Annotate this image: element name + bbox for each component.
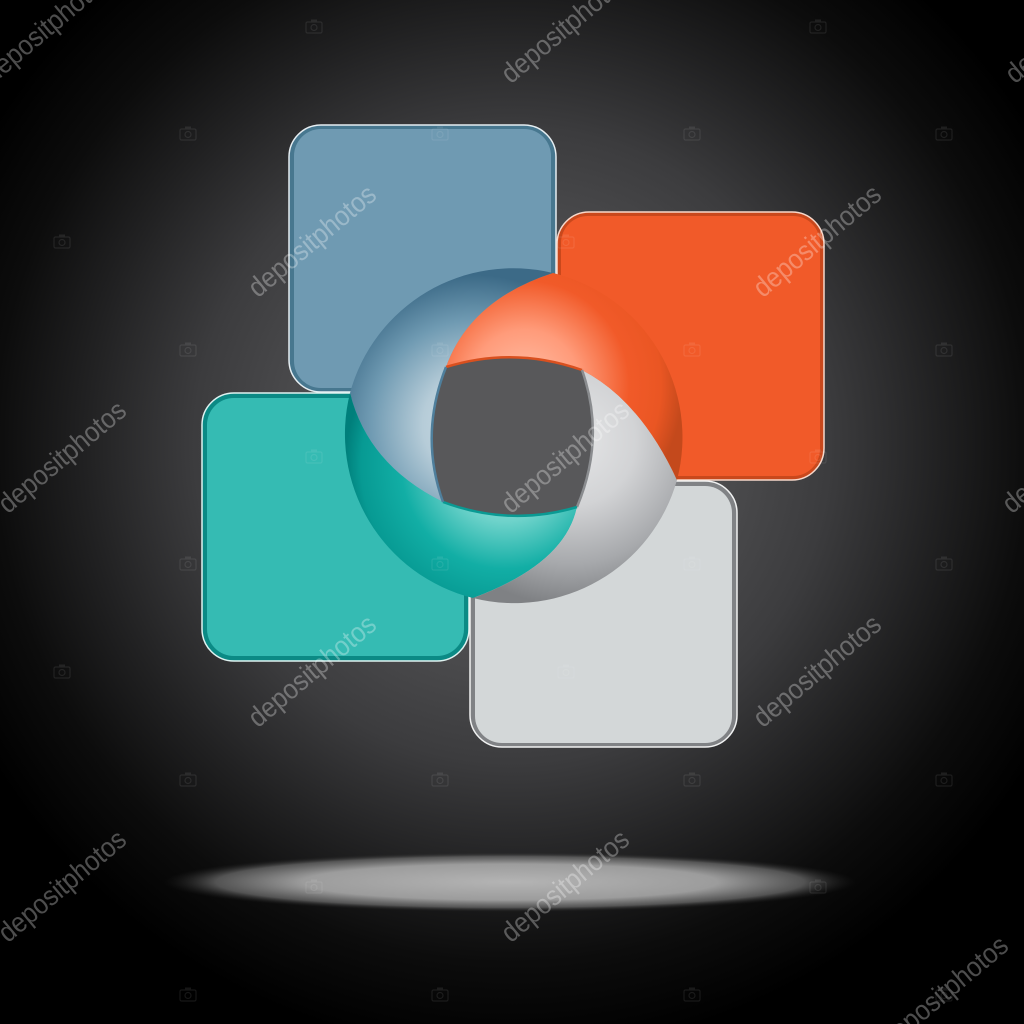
panel: teal square [202, 393, 469, 661]
ring segment: orange [446, 273, 682, 480]
hole lip: bottom [443, 502, 577, 516]
watermark texts: depositphotos [495, 823, 635, 948]
ring segment: teal [345, 393, 577, 598]
hole lip: right [577, 370, 593, 507]
watermark texts: depositphotos [747, 178, 887, 303]
watermark texts: depositphotos [242, 608, 382, 733]
watermark texts: depositphotos [242, 178, 382, 303]
ring segment: grey [473, 370, 677, 603]
floor light ellipse [164, 852, 856, 912]
watermark texts: depositphotos [747, 608, 887, 733]
central ring [345, 268, 682, 603]
watermark texts: depositphotos [495, 394, 635, 519]
hole lip: top [446, 357, 582, 370]
centre hole [432, 357, 593, 516]
ring segment: blue [350, 268, 553, 502]
panel: blue square [289, 125, 556, 392]
hole lip: left [432, 367, 446, 502]
panel: grey square [470, 481, 737, 747]
panel: orange square [557, 212, 824, 480]
